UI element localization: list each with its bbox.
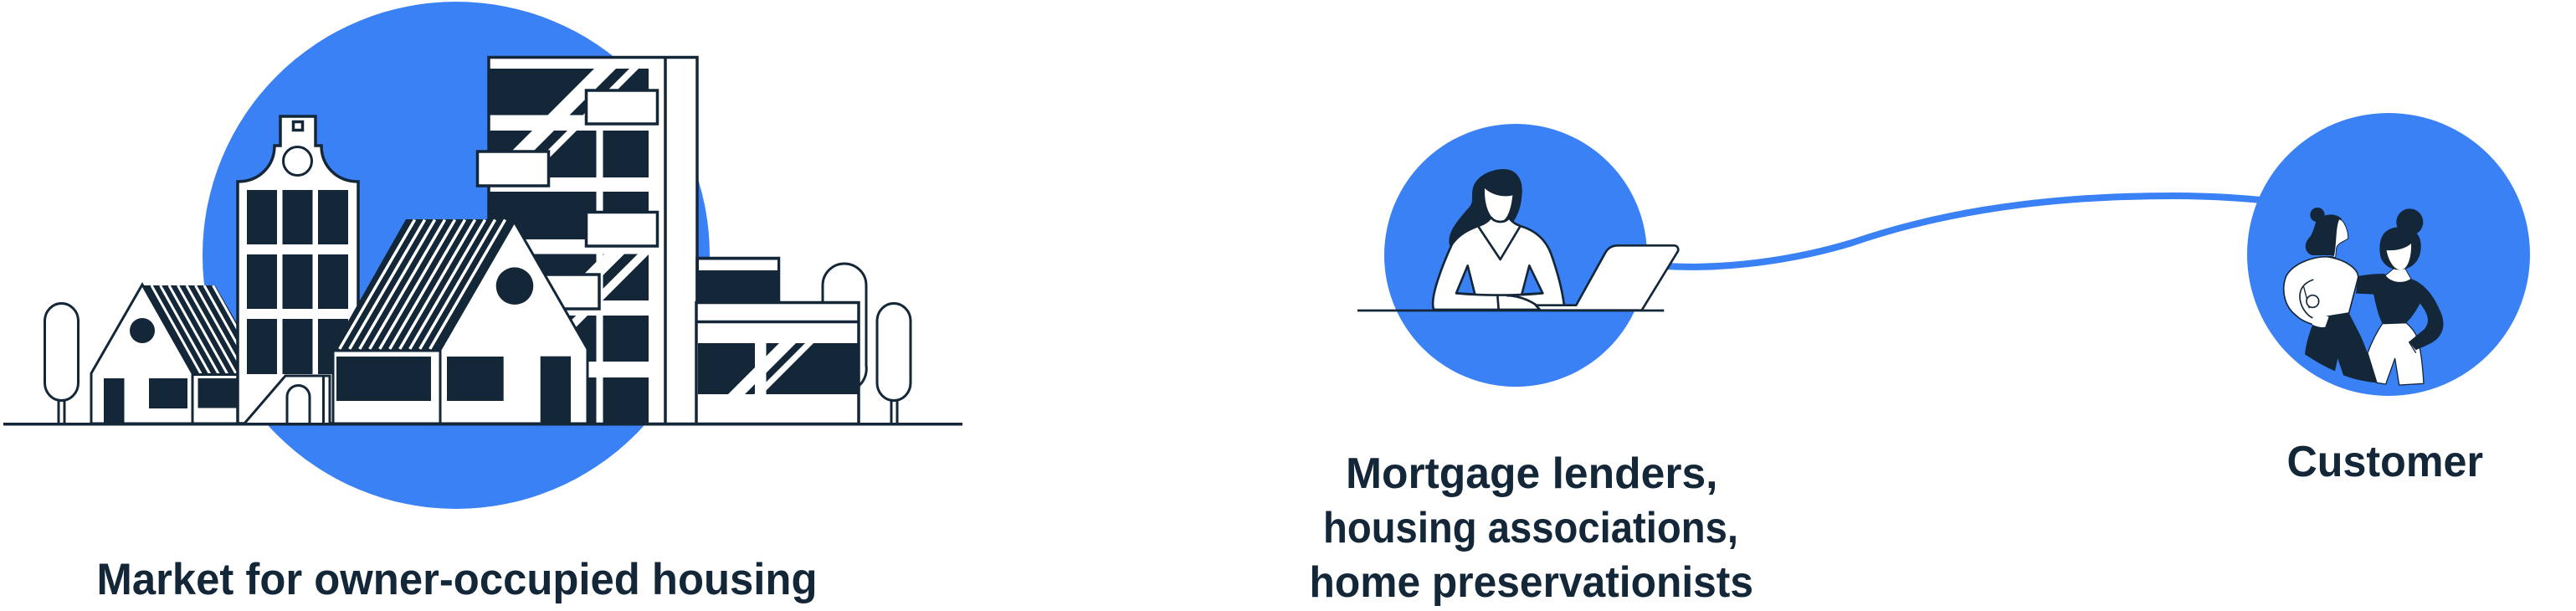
panel: owner-occupied housing market [3,2,962,509]
heading: market label: Market for owner-occupied housing [97,555,817,604]
left person hand [2312,314,2329,327]
left person face [2324,219,2348,257]
left person arm [2300,280,2313,318]
balcony 2 [477,151,549,186]
icon: small tree right [877,303,911,424]
connector line between lenders and customer [1665,196,2261,267]
heading: customer label: Customer [2286,438,2483,486]
arm gaps [1456,265,1542,295]
right person neck [2385,269,2411,282]
panel: mortgage lenders [1357,124,1678,387]
icon: tall canal house [238,116,358,424]
face [1485,188,1512,222]
ground line [3,423,962,425]
attic square [293,122,303,131]
icon: rear tree [823,264,866,393]
blue background circle [203,2,710,509]
right person hair [2379,208,2423,270]
icon: two customers [2284,208,2444,385]
balcony 3 [586,213,658,246]
left person sweater [2284,257,2358,325]
entrance porch [244,376,330,424]
laptop [1536,245,1678,311]
icon: low annex building [696,258,859,424]
gable window [283,147,311,176]
heading: lenders label [1309,449,1753,607]
blue circle [1384,124,1647,387]
left person hair [2306,208,2342,255]
hair [1450,170,1521,245]
right person top [2356,274,2444,350]
tower floors [487,69,649,424]
heading: lenders label: housing associations, [1323,504,1738,552]
heading: lenders label: home preservationists [1309,558,1753,607]
arched door [287,385,310,424]
tower core divider [664,57,667,424]
left person trousers [2305,313,2377,383]
panel: customer [2247,113,2530,396]
pocket line [2409,341,2416,353]
forearm lines [1456,293,1542,310]
shopfront [333,351,440,424]
neckline [1478,226,1521,259]
gable front [440,222,588,424]
torso and arms [1433,217,1564,310]
icon: small tree left [45,303,79,424]
right person trousers [2368,323,2424,385]
icon: small striped-roof house [90,282,236,423]
icon: woman at laptop [1357,170,1678,311]
blue circle [2247,113,2530,396]
heading: lenders label: Mortgage lenders, [1346,449,1717,498]
icon: apartment tower [477,57,697,424]
canal house windows [247,190,348,374]
balcony 1 [586,90,658,124]
balcony 4 [527,275,599,309]
window reflections [512,69,649,326]
right person face [2387,244,2411,270]
desk line [1357,307,1664,314]
icon: large striped-roof house [331,219,588,424]
